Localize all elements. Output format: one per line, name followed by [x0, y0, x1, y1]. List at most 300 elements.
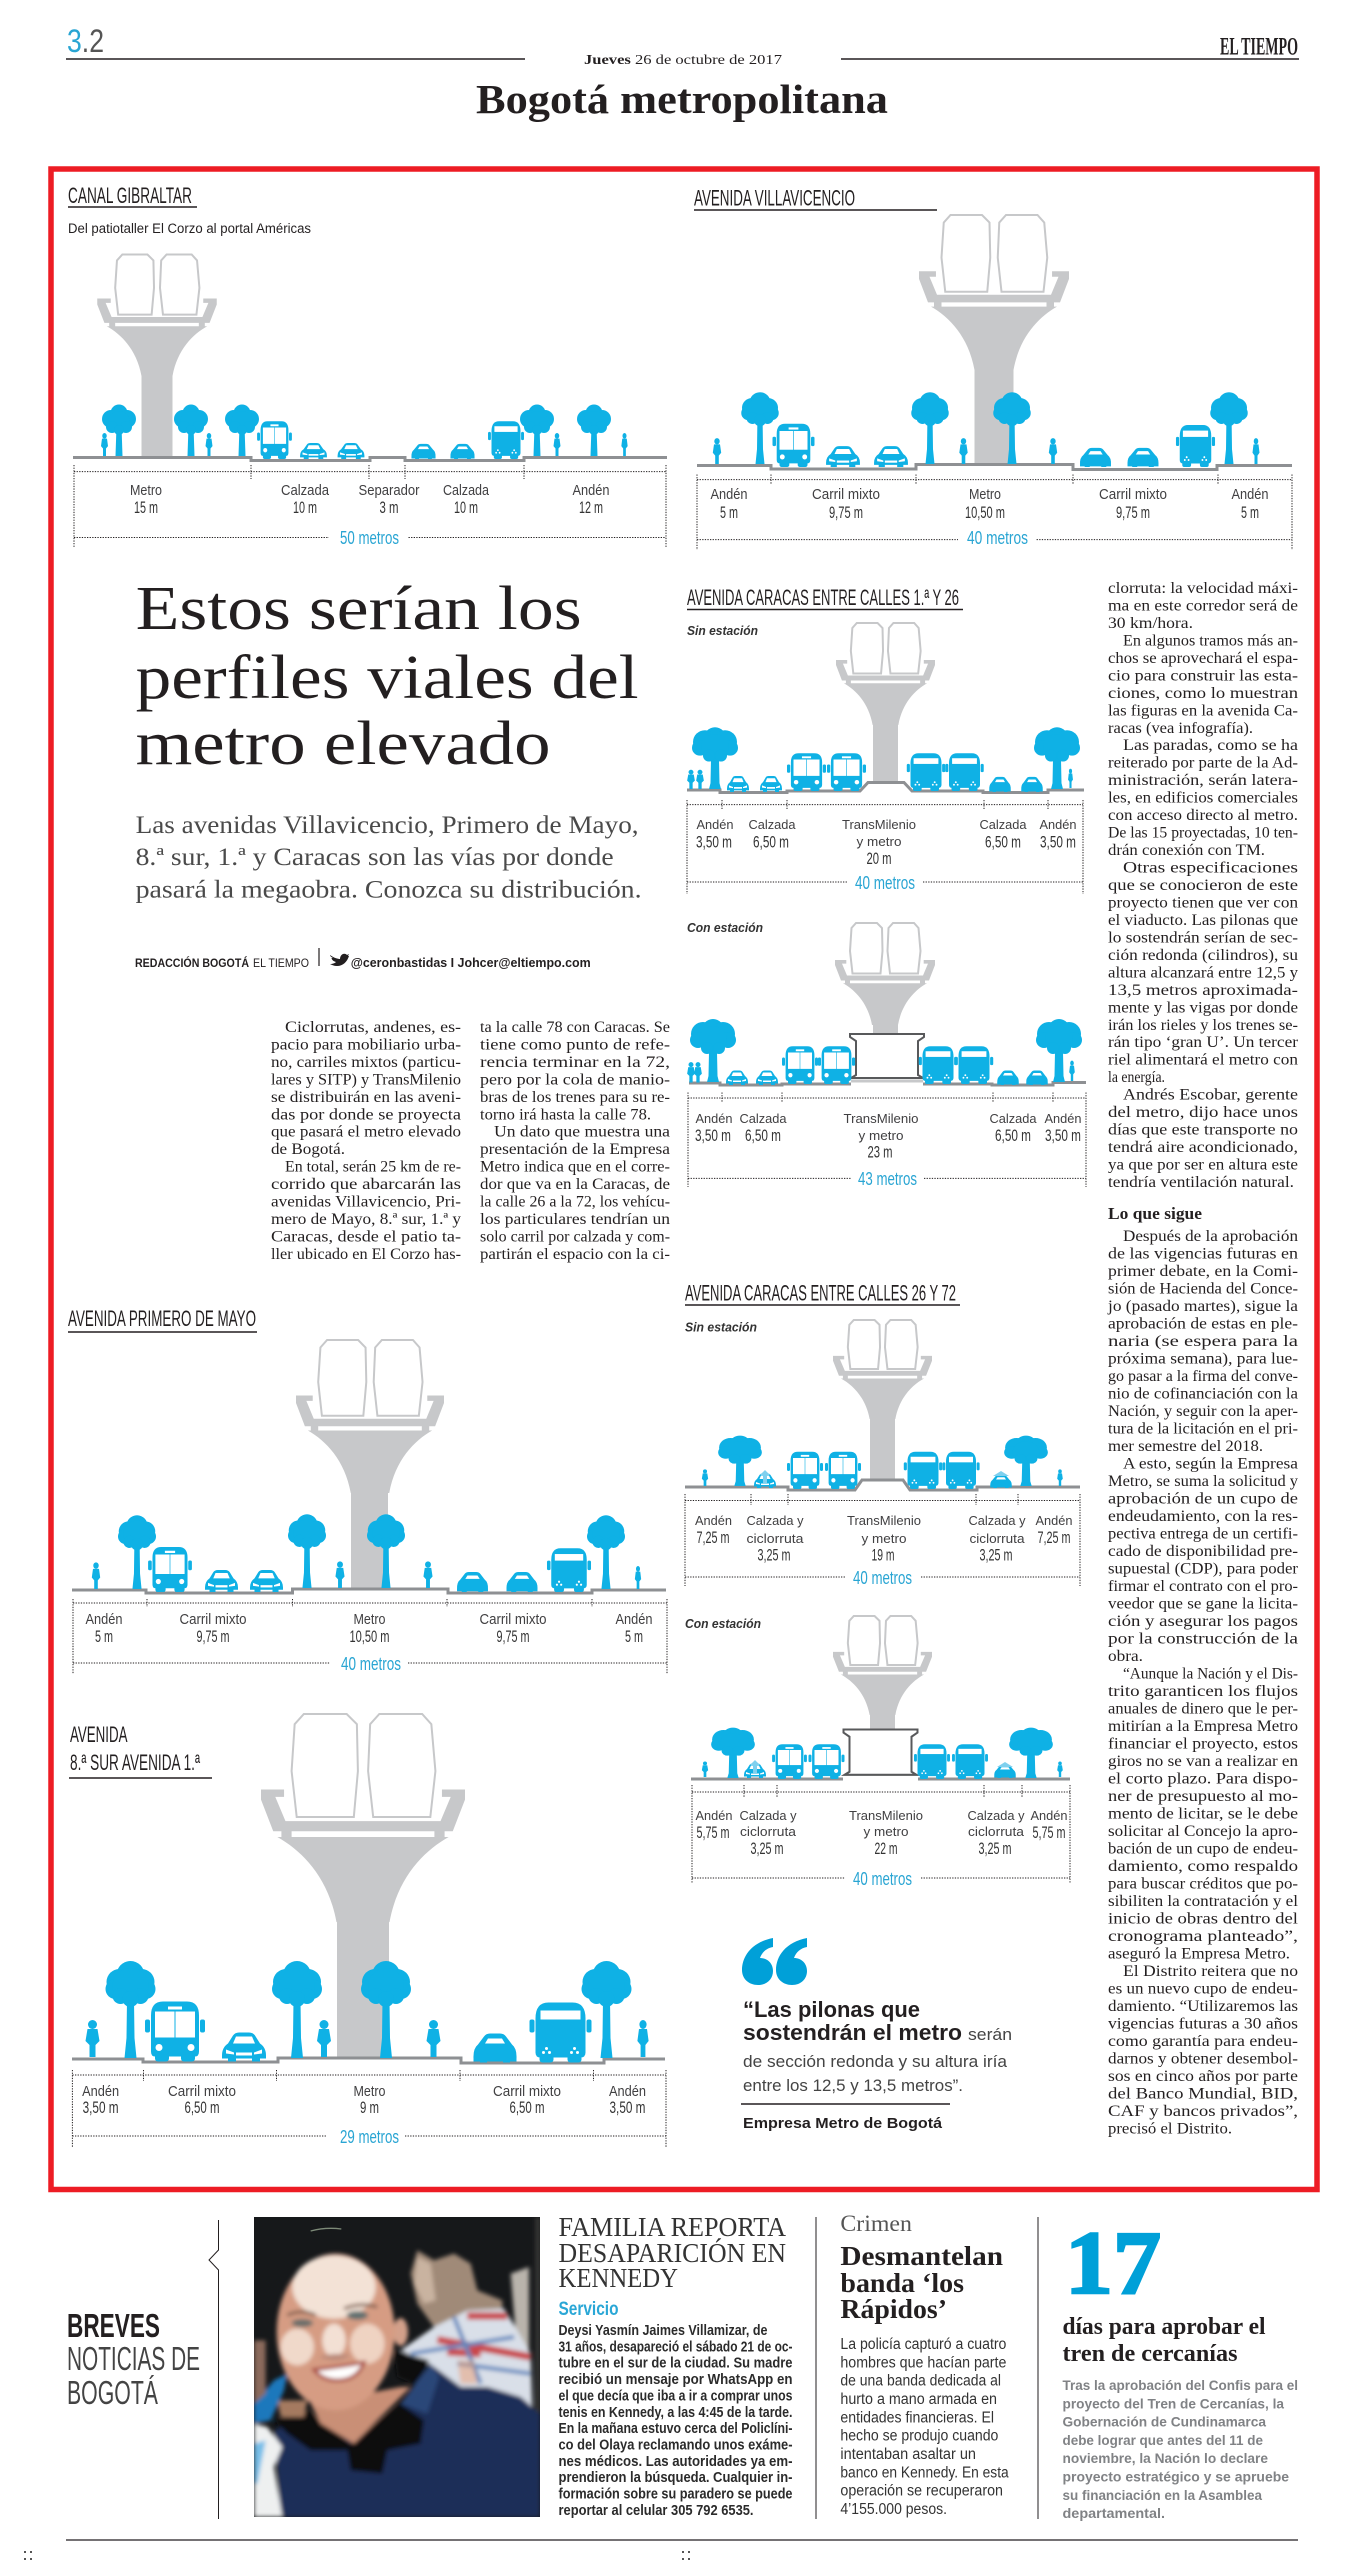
news brief: Familia reporta desaparición en Kennedy: co del Olaya reclamando unos exáme-: [558, 2438, 793, 2454]
news brief: Crimen: Crimen: [840, 2211, 912, 2236]
quote text: de sección redonda y su altura iría: [743, 2052, 1008, 2071]
dimension labels: 3,25 m: [758, 1546, 790, 1564]
news brief: 17 días: días para aprobar el: [1062, 2314, 1266, 2340]
dimension labels: 20 m: [866, 850, 892, 868]
subheading: Lo que sigue: Lo que sigue: [1108, 1204, 1202, 1223]
news brief: Crimen: entidades financieras. El: [840, 2409, 994, 2426]
article text: column 3: CAF y bancos privados”,: [1108, 2103, 1298, 2120]
article text: column 3: trito garanticen los flujos: [1108, 1683, 1298, 1700]
heading: [69, 1722, 212, 1778]
news brief: Familia reporta desaparición en Kennedy: Servicio: [558, 2299, 618, 2320]
byline: @ceronbastidas I Johcer@eltiempo.com: [351, 955, 591, 970]
article text: column 3: las figuras en la avenida Ca-: [1108, 702, 1298, 719]
quote text: serán: [968, 2025, 1012, 2044]
article text: column 3: aprobación de estas en ple-: [1108, 1316, 1298, 1332]
article text: column 3: Después de la aprobación: [1123, 1228, 1298, 1245]
dimension labels: Andén: [710, 487, 748, 503]
standfirst: 8.ª sur, 1.ª y Caracas son las vías por donde: [136, 844, 614, 871]
dimension labels: ciclorruta: [746, 1532, 804, 1546]
article text: column 3: proyecto tienen que ver con: [1108, 894, 1298, 912]
dimension lines: [685, 1494, 1080, 1586]
article text: column 3: ciones, como lo muestran: [1108, 685, 1298, 702]
dimension lines: [687, 800, 1083, 894]
road profile illustration: [697, 215, 1292, 470]
dimension labels: 40 metros: [853, 1568, 912, 1588]
article text: column 3: Las paradas, como se ha: [1123, 737, 1298, 754]
article text: column 3: firmar el contrato con el pro-: [1108, 1578, 1298, 1595]
article text: column 1: das por donde se proyecta: [271, 1106, 461, 1123]
heading: 8.ª SUR AVENIDA 1.ª: [70, 1750, 201, 1775]
news brief: 17 días: departamental.: [1062, 2506, 1165, 2521]
article text: column 3: supuestal (CDP), para poder: [1108, 1560, 1299, 1578]
news brief: 17 días: Tras la aprobación del Confis para el: [1062, 2378, 1298, 2393]
news brief: Crimen: hombres que hacían parte: [840, 2354, 1006, 2371]
dimension labels: 6,50 m: [745, 1127, 781, 1145]
dimension labels: 15 m: [134, 499, 158, 517]
dimension labels: 3,50 m: [696, 834, 732, 852]
article text: column 3: rán tipo ‘gran U’. Un tercer: [1108, 1034, 1299, 1051]
dimension labels: 10,50 m: [350, 1628, 390, 1646]
dimension lines: [73, 1599, 667, 1674]
road profile illustration: [72, 1340, 666, 1593]
article text: column 3: primer debate, en la Comi-: [1108, 1263, 1298, 1280]
road profile illustration: [73, 254, 667, 460]
article text: column 3: para buscar créditos que po-: [1108, 1876, 1298, 1892]
dimension lines: [688, 1092, 1086, 1187]
article text: column 2: solo carril por calzada y com-: [480, 1228, 670, 1245]
article text: column 3: 30 km/hora.: [1108, 615, 1193, 632]
headline: Estos serían los: [136, 575, 582, 643]
dimension labels: 3 m: [380, 499, 398, 517]
article text: column 3: aseguró la Empresa Metro.: [1108, 1946, 1290, 1962]
dimension labels: Andén: [1044, 1112, 1082, 1126]
article text: column 3: anuales de dinero que le per-: [1108, 1700, 1298, 1718]
article text: column 1: lares y SITP) y TransMilenio: [271, 1071, 461, 1088]
dimension labels: Calzada: [281, 483, 330, 499]
article text: column 2: Metro indica que en el corre-: [480, 1159, 670, 1176]
dimension labels: Andén: [86, 1612, 122, 1628]
dimension labels: Andén: [696, 818, 734, 832]
standfirst: pasará la megaobra. Conozca su distribución.: [136, 876, 642, 904]
dimension labels: Metro: [354, 2084, 386, 2100]
date line: Jueves 26 de octubre de 2017: [584, 53, 782, 68]
article text: column 3: El Distrito reitera que no: [1123, 1963, 1298, 1980]
panel: Breves label: BOGOTÁ: [67, 2374, 158, 2411]
dimension labels: TransMilenio: [842, 818, 916, 832]
article text: column 3: pectiva entrega de un certifi-: [1108, 1526, 1298, 1542]
dimension labels: ciclorruta: [740, 1825, 796, 1839]
article text: column 3: ción y asegurar los pagos: [1108, 1613, 1298, 1630]
article text: column 3: damiento, como respaldo: [1108, 1858, 1298, 1875]
article text: column 3: A esto, según la Empresa: [1123, 1456, 1298, 1472]
article text: column 3: del metro, dijo hace unos: [1108, 1104, 1298, 1121]
news brief: Familia reporta desaparición en Kennedy: formación sobre su paradero se puede: [558, 2487, 792, 2503]
dimension labels: Andén: [1030, 1809, 1068, 1823]
page number: 3.2: [67, 23, 104, 59]
dimension labels: 9,75 m: [829, 504, 863, 522]
article text: column 3: ya que por ser en altura este: [1108, 1156, 1298, 1174]
article text: column 3: el viaducto. Las pilonas que: [1108, 912, 1298, 929]
panel: Avenida Primero de Mayo: [68, 1306, 667, 1674]
article text: column 3: días que este transporte no: [1108, 1122, 1298, 1139]
article text: column 3: “Aunque la Nación y el Dis-: [1123, 1666, 1298, 1682]
article text: column 1: no, carriles mixtos (particu-: [271, 1054, 461, 1071]
news brief: Crimen: Desmantelan: [840, 2241, 1003, 2271]
quote text: sostendrán el metro: [743, 2020, 962, 2045]
dimension labels: 9 m: [360, 2099, 379, 2117]
article text: column 3: es un nuevo cupo de endeu-: [1108, 1980, 1298, 1998]
heading: AVENIDA VILLAVICENCIO: [694, 186, 855, 210]
article text: column 3: En algunos tramos más an-: [1123, 632, 1298, 649]
dimension labels: 12 m: [579, 499, 603, 517]
dimension labels: [695, 1514, 1073, 1588]
panel: pull quote: [741, 1938, 1012, 2132]
article text: column 3: aprobación de un cupo de: [1108, 1490, 1298, 1508]
dimension labels: Calzada: [748, 818, 796, 832]
dimension labels: 6,50 m: [753, 834, 789, 852]
news brief: Familia reporta desaparición en Kennedy: tubre en el sur de la ciudad. Su madre: [558, 2356, 792, 2372]
article text: column 3: jo (pasado martes), sigue la: [1107, 1298, 1298, 1315]
dimension labels: ciclorruta: [970, 1532, 1025, 1546]
dimension labels: TransMilenio: [844, 1112, 919, 1126]
standfirst: [136, 812, 642, 904]
article text: column 3: Otras especificaciones: [1123, 860, 1298, 876]
article text: column 3: ministración, serán latera-: [1108, 772, 1298, 789]
article text: column 3: ner de presupuesto al mo-: [1108, 1788, 1298, 1805]
dimension labels: [130, 483, 610, 548]
article text: column 3: tendría ventilación natural.: [1108, 1174, 1294, 1191]
heading: [68, 183, 197, 208]
news brief: 17 días: [1062, 2214, 1298, 2521]
dimension labels: 43 metros: [858, 1169, 917, 1189]
dimension lines: [697, 474, 1292, 550]
article text: column 3: reiterado por parte de la Ad-: [1108, 755, 1298, 772]
heading: CANAL GIBRALTAR: [68, 183, 192, 208]
article text: column 3: giros no se van a realizar en: [1108, 1753, 1298, 1770]
article text: column 2: los particulares tendrían un: [480, 1211, 670, 1228]
article text: column 2: rencia terminar en la 72,: [480, 1054, 670, 1071]
article text: column 3: del Banco Mundial, BID,: [1108, 2086, 1298, 2102]
news brief: Familia reporta desaparición en Kennedy: [558, 2212, 793, 2519]
dimension labels: 5 m: [95, 1628, 113, 1646]
dimension labels: [695, 1112, 1082, 1189]
news brief: Familia reporta desaparición en Kennedy: recibió un mensaje por WhatsApp en: [558, 2372, 792, 2388]
article text: column 3: sos en cinco años por parte: [1108, 2068, 1298, 2085]
byline: [135, 948, 591, 970]
article text: column 3: altura alcanzará entre 12,5 y: [1108, 964, 1298, 981]
article text: column 3: inicio de obras dentro del: [1108, 1910, 1299, 1928]
dimension labels: 3,25 m: [978, 1840, 1012, 1858]
dimension labels: 6,50 m: [985, 834, 1021, 852]
article text: column 3: como garantía para endeu-: [1108, 2033, 1298, 2050]
article text: column 3: irán los rieles y los trenes se-: [1108, 1017, 1298, 1034]
article text: column 2: [480, 1019, 670, 1263]
panel: Canal Gibraltar: [68, 183, 667, 548]
dimension lines: [74, 465, 666, 547]
article text: column 2: partirán el espacio con la ci-: [480, 1246, 670, 1263]
dimension labels: 5,75 m: [696, 1824, 730, 1842]
dimension labels: 40 metros: [341, 1654, 401, 1674]
article text: column 3: ma en este corredor será de: [1108, 598, 1298, 614]
profile without station: [685, 1320, 1080, 1490]
quote text: “Las pilonas que: [743, 1997, 920, 2022]
news brief: 17 días: Gobernación de Cundinamarca: [1062, 2415, 1266, 2430]
dimension labels: 6,50 m: [510, 2099, 544, 2117]
article text: column 3: veedor que se gane la licita-: [1108, 1596, 1298, 1612]
dimension labels: Andén: [1040, 818, 1077, 832]
news brief: Crimen: Rápidos’: [840, 2294, 947, 2324]
article text: column 1: corrido que abarcarán las: [271, 1176, 461, 1193]
article text: column 3: riel alimentará el metro con: [1108, 1052, 1298, 1069]
news brief: Familia reporta desaparición en Kennedy: reportar al celular 305 792 6535.: [558, 2503, 754, 2519]
dimension lines: [72, 2070, 666, 2148]
logo: El Tiempo: EL TIEMPO: [1220, 34, 1298, 60]
dimension labels: 19 m: [872, 1546, 894, 1564]
dimension labels: 7,25 m: [1038, 1529, 1070, 1547]
dimension labels: Carril mixto: [480, 1612, 546, 1628]
quote text: entre los 12,5 y 13,5 metros”.: [743, 2076, 963, 2095]
dimension labels: 6,50 m: [184, 2099, 220, 2117]
dimension labels: [82, 2084, 646, 2147]
dimension labels: Calzada: [740, 1112, 787, 1126]
article text: column 3: Andrés Escobar, gerente: [1123, 1087, 1298, 1104]
dimension labels: Andén: [82, 2084, 119, 2100]
dimension labels: Carril mixto: [1099, 487, 1167, 503]
article text: column 3: cado de disponibilidad pre-: [1108, 1543, 1298, 1560]
news brief: Familia reporta desaparición en Kennedy: FAMILIA REPORTA: [558, 2212, 786, 2242]
dimension labels: Andén: [1232, 487, 1268, 503]
dimension labels: Metro: [130, 483, 162, 499]
article text: column 3: drán conexión con TM.: [1108, 842, 1265, 859]
article text: column 1: que pasará el metro elevado: [271, 1124, 461, 1141]
panel: Avenida Villavicencio: [694, 186, 1292, 550]
dimension labels: Calzada: [980, 818, 1027, 832]
news brief: 17 días: noviembre, la Nación lo declare: [1062, 2451, 1268, 2466]
news brief: 17 días: 17: [1065, 2214, 1161, 2313]
dimension labels: Metro: [354, 1612, 386, 1628]
dimension labels: 10,50 m: [965, 504, 1005, 522]
article text: column 3: tura de la licitación en el pri-: [1108, 1420, 1298, 1438]
news brief: 17 días: proyecto estratégico y se apruebe: [1062, 2470, 1289, 2484]
article text: column 3: que se conocieron de este: [1108, 877, 1298, 894]
dimension labels: [696, 1809, 1068, 1889]
article text: column 3: próxima semana), para lue-: [1108, 1350, 1298, 1368]
news brief: Crimen: banco en Kennedy. En esta: [840, 2464, 1009, 2481]
profile without station: [687, 623, 1084, 792]
news brief: Familia reporta desaparición en Kennedy: Deysi Yasmín Jaimes Villamizar, de: [558, 2323, 768, 2339]
news brief: Familia reporta desaparición en Kennedy: el que decía que iba a ir a comprar unos: [558, 2388, 792, 2404]
panel: red frame: [51, 169, 1317, 2190]
dimension labels: TransMilenio: [847, 1514, 921, 1528]
article text: column 1: [271, 1019, 461, 1263]
article text: column 3: naria (se espera para la: [1108, 1333, 1298, 1350]
article text: column 2: dor que va en la Caracas, de: [480, 1176, 670, 1193]
dimension labels: Andén: [696, 1809, 733, 1823]
article text: column 1: mero de Mayo, 8.ª sur, 1.ª y: [271, 1211, 461, 1228]
label: sin estación: Sin estación: [687, 624, 758, 638]
dimension labels: Calzada: [443, 483, 490, 499]
dimension labels: Calzada y: [746, 1514, 804, 1528]
dimension labels: 5 m: [1241, 504, 1259, 522]
dimension labels: Andén: [695, 1514, 732, 1528]
news brief: Crimen: hecho se produjo cuando: [840, 2428, 998, 2445]
panel: Avenida Caracas entre calles 1.ª y 26: [687, 585, 1086, 1189]
news brief: Crimen: [816, 2211, 1038, 2519]
dimension labels: 5,75 m: [1032, 1824, 1066, 1842]
dimension labels: 3,50 m: [83, 2099, 119, 2117]
standfirst: Las avenidas Villavicencio, Primero de Mayo,: [136, 812, 639, 839]
article text: column 3: lo sostendrán serían de sec-: [1108, 929, 1298, 946]
subheading: Del patiotaller El Corzo al portal Américas: [68, 221, 311, 236]
photo: missing woman: [254, 2217, 540, 2517]
dimension labels: [710, 487, 1268, 548]
dimension labels: 22 m: [874, 1840, 898, 1858]
news brief: Familia reporta desaparición en Kennedy: nes médicos. Las autoridades ya em-: [558, 2454, 793, 2470]
dimension labels: y metro: [858, 1129, 904, 1143]
news brief: Familia reporta desaparición en Kennedy: En la mañana estuvo cerca del Policlíni-: [558, 2421, 793, 2437]
article text: column 3: mitirían a la Empresa Metro: [1108, 1718, 1298, 1735]
article text: column 3: cronograma planteado”,: [1108, 1928, 1298, 1945]
dimension lines: [692, 1785, 1070, 1883]
dimension labels: Andén: [696, 1112, 733, 1126]
dimension labels: 23 m: [868, 1144, 892, 1162]
article text: column 3: les, en edificios comerciales: [1108, 790, 1298, 807]
dimension labels: 50 metros: [340, 528, 399, 548]
article text: column 3: precisó el Distrito.: [1108, 2120, 1232, 2138]
dimension labels: 5 m: [625, 1628, 643, 1646]
article text: column 1: avenidas Villavicencio, Pri-: [271, 1194, 461, 1210]
dimension labels: 10 m: [454, 499, 478, 517]
news brief: 17 días: su financiación en la Asamblea: [1062, 2488, 1262, 2503]
profile with station: [691, 1616, 1070, 1779]
dimension labels: 9,75 m: [196, 1628, 230, 1646]
panel: Avenida 8.ª sur y Avenida 1.ª: [69, 1714, 666, 2148]
byline: EL TIEMPO: [253, 956, 309, 970]
article text: column 3: racas (vea infografía).: [1108, 720, 1253, 737]
dimension labels: Andén: [1036, 1514, 1073, 1528]
news brief: Crimen: 4’155.000 pesos.: [840, 2501, 947, 2518]
article text: column 3: nio de cofinanciación con la: [1108, 1386, 1298, 1402]
headline: [136, 575, 639, 778]
article text: column 1: se distribuirán en las aveni-: [271, 1089, 461, 1106]
article text: column 1: Ciclorrutas, andenes, es-: [285, 1019, 461, 1036]
dimension labels: Carril mixto: [493, 2084, 561, 2100]
dimension labels: 3,25 m: [980, 1546, 1012, 1564]
byline: REDACCIÓN BOGOTÁ: [135, 955, 249, 970]
news brief: 17 días: proyecto del Tren de Cercanías, la: [1062, 2396, 1284, 2411]
dimension labels: Calzada y: [968, 1809, 1025, 1823]
headline: perfiles viales del: [136, 644, 639, 712]
article text: column 2: ta la calle 78 con Caracas. Se: [480, 1019, 670, 1036]
dimension labels: Separador: [358, 483, 420, 499]
article text: column 3: Metro, se suma la solicitud y: [1108, 1473, 1298, 1490]
article text: column 3: 13,5 metros aproximada-: [1108, 982, 1298, 999]
article text: column 3: go pasar a la firma del conve-: [1108, 1368, 1298, 1385]
icon: quotation marks: [742, 1938, 807, 1985]
dimension labels: 3,50 m: [1040, 834, 1076, 852]
label: sin estación: Sin estación: [685, 1320, 757, 1334]
dimension labels: [86, 1612, 652, 1674]
article text: column 3: [1107, 580, 1299, 2138]
dimension labels: y metro: [862, 1532, 907, 1546]
dimension labels: 9,75 m: [1116, 504, 1150, 522]
dimension labels: 7,25 m: [696, 1529, 730, 1547]
news brief: Crimen: de una banda dedicada al: [840, 2373, 1001, 2390]
dimension labels: y metro: [856, 835, 902, 849]
dimension labels: Andén: [572, 483, 610, 499]
news brief: Familia reporta desaparición en Kennedy: KENNEDY: [558, 2263, 678, 2293]
article text: column 1: ller ubicado en El Corzo has-: [271, 1246, 461, 1263]
dimension labels: 40 metros: [855, 873, 915, 893]
article text: column 3: bación de un cupo de endeu-: [1108, 1840, 1298, 1858]
label: con estación: Con estación: [687, 921, 763, 935]
news brief: Familia reporta desaparición en Kennedy: tenis en Kennedy, a las 4:45 de la tarde.: [558, 2405, 792, 2421]
label: con estación: Con estación: [685, 1617, 761, 1631]
article text: column 3: mente y las vigas por donde: [1108, 999, 1298, 1016]
article text: column 1: En total, serán 25 km de re-: [285, 1159, 461, 1176]
article text: column 3: mento de licitar, se le debe: [1108, 1806, 1298, 1822]
article text: column 3: clorruta: la velocidad máxi-: [1108, 580, 1298, 597]
dimension labels: Andén: [616, 1612, 652, 1628]
dimension labels: Andén: [609, 2084, 646, 2100]
panel: Breves label: BREVES: [67, 2307, 160, 2344]
article text: column 2: pero por la cola de manio-: [480, 1071, 670, 1088]
dimension labels: 3,50 m: [610, 2099, 646, 2117]
article text: column 1: pacio para mobiliario urba-: [271, 1036, 461, 1054]
dimension labels: 9,75 m: [496, 1628, 530, 1646]
article text: column 3: vigencias futuras a 30 años: [1108, 2016, 1298, 2032]
article text: column 2: tiene como punto de refe-: [480, 1036, 670, 1054]
news brief: Crimen: La policía capturó a cuatro: [840, 2336, 1006, 2353]
dimension labels: Calzada y: [740, 1809, 797, 1823]
news brief: Familia reporta desaparición en Kennedy: prendieron la búsqueda. Cualquier in-: [558, 2470, 793, 2486]
news brief: Crimen: hurto a mano armada en: [840, 2391, 997, 2408]
profile with station: [687, 923, 1086, 1085]
news brief: Crimen: banda ‘los: [840, 2268, 964, 2298]
news brief: Crimen: operación se recuperaron: [840, 2483, 1003, 2500]
article text: column 3: tendrá aire acondicionado,: [1108, 1139, 1298, 1156]
article text: column 3: sibiliten la contratación y el: [1108, 1893, 1299, 1910]
dimension labels: 3,50 m: [695, 1127, 731, 1145]
article text: column 3: con acceso directo al metro.: [1108, 807, 1298, 824]
news brief: 17 días: debe lograr que antes del 11 de: [1062, 2433, 1263, 2448]
article text: column 3: ción redonda (cilindros), su: [1108, 947, 1298, 964]
dimension labels: 40 metros: [967, 528, 1028, 548]
article text: column 3: mer semestre del 2018.: [1108, 1438, 1263, 1455]
article text: column 3: sión de Hacienda del Conce-: [1108, 1280, 1298, 1298]
article text: column 1: Caracas, desde el patio ta-: [271, 1228, 461, 1245]
headline: metro elevado: [136, 710, 551, 778]
article text: column 3: por la construcción de la: [1108, 1630, 1298, 1648]
road profile illustration: [72, 1714, 665, 2063]
article text: column 2: torno irá hasta la calle 78.: [480, 1106, 651, 1123]
news brief: Crimen: intentaban asaltar un: [840, 2446, 976, 2463]
dimension labels: 5 m: [720, 504, 738, 522]
article text: column 3: obra.: [1108, 1648, 1143, 1665]
dimension labels: 40 metros: [853, 1869, 912, 1889]
article text: column 3: cio para construir las esta-: [1108, 667, 1298, 684]
dimension labels: Carril mixto: [812, 487, 880, 503]
article text: column 3: darnos y obtener desembol-: [1108, 2050, 1298, 2068]
dimension labels: TransMilenio: [849, 1809, 923, 1823]
dimension labels: 29 metros: [340, 2127, 399, 2147]
article text: column 1: de Bogotá.: [271, 1141, 345, 1158]
article text: column 3: financiar el proyecto, estos: [1108, 1736, 1298, 1752]
heading: AVENIDA CARACAS ENTRE CALLES 26 Y 72: [685, 1280, 956, 1306]
dimension labels: Carril mixto: [180, 1612, 246, 1628]
article text: column 3: chos se aprovechará el espa-: [1108, 650, 1298, 667]
dimension labels: Calzada y: [968, 1514, 1026, 1528]
